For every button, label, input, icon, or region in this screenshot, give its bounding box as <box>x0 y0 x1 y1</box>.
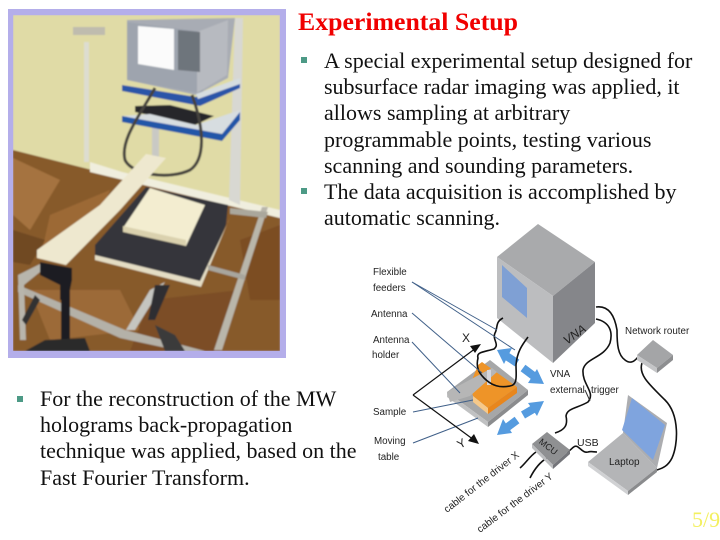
callout labels <box>371 267 690 535</box>
callout labels: cable for the driver X <box>442 450 522 515</box>
small connector arc <box>585 390 590 401</box>
callout labels: Antenna <box>373 335 410 346</box>
callout labels: table <box>378 452 400 463</box>
icon: network router <box>637 340 673 373</box>
text block: setup description: programmable points, testing various <box>324 127 652 152</box>
text block: reconstruction: technique was applied, based on the <box>40 438 356 463</box>
text block: reconstruction <box>17 386 356 490</box>
cables <box>477 307 676 478</box>
icon: VNA unit <box>497 224 595 363</box>
axis arrows X and Y: Y <box>454 435 468 452</box>
text block: setup description: automatic scanning. <box>324 205 500 230</box>
callout labels: Flexible <box>373 267 407 278</box>
icon: moving table with sample <box>447 360 528 427</box>
callout labels: Moving <box>374 436 406 447</box>
text block: setup description: subsurface radar imaging was applied, it <box>324 74 680 99</box>
callout labels: cable for the driver Y <box>475 471 556 535</box>
icon: MCU: MCU <box>537 436 559 457</box>
callout labels: feeders <box>373 283 406 294</box>
icon: laptop <box>588 395 667 495</box>
text block: reconstruction: For the reconstruction of the MW <box>40 386 336 411</box>
text block: reconstruction: holograms back-propagation <box>40 412 292 437</box>
text block: setup description <box>301 48 692 230</box>
callout labels: holder <box>372 350 400 361</box>
callout labels: USB <box>577 437 599 449</box>
callout labels: external <box>550 385 585 396</box>
photo: experimental setup <box>8 9 286 358</box>
text block: setup description: scanning and sounding parameters. <box>324 153 633 178</box>
title: Experimental Setup <box>298 7 518 36</box>
icon: blue movement arrows <box>505 355 535 429</box>
callout labels: Antenna <box>371 309 408 320</box>
icon: VNA unit: VNA <box>561 322 589 347</box>
text block: setup description: allows sampling at arbitrary <box>324 100 570 125</box>
leader lines <box>412 282 515 443</box>
text block: setup description: A special experimental setup designed for <box>324 48 692 73</box>
icon: laptop: Laptop <box>609 457 640 468</box>
axis arrows X and Y: X <box>462 331 470 345</box>
page number: 5/9 <box>692 507 720 532</box>
text block: reconstruction: Fast Fourier Transform. <box>40 465 250 490</box>
callout labels: VNA <box>550 369 571 380</box>
callout labels: Network router <box>625 326 690 337</box>
callout labels: trigger <box>591 385 620 396</box>
text block: setup description: The data acquisition is accomplished by <box>324 179 677 204</box>
callout labels: Sample <box>373 407 407 418</box>
axis arrows X and Y <box>413 331 481 452</box>
icon: MCU <box>532 432 570 469</box>
